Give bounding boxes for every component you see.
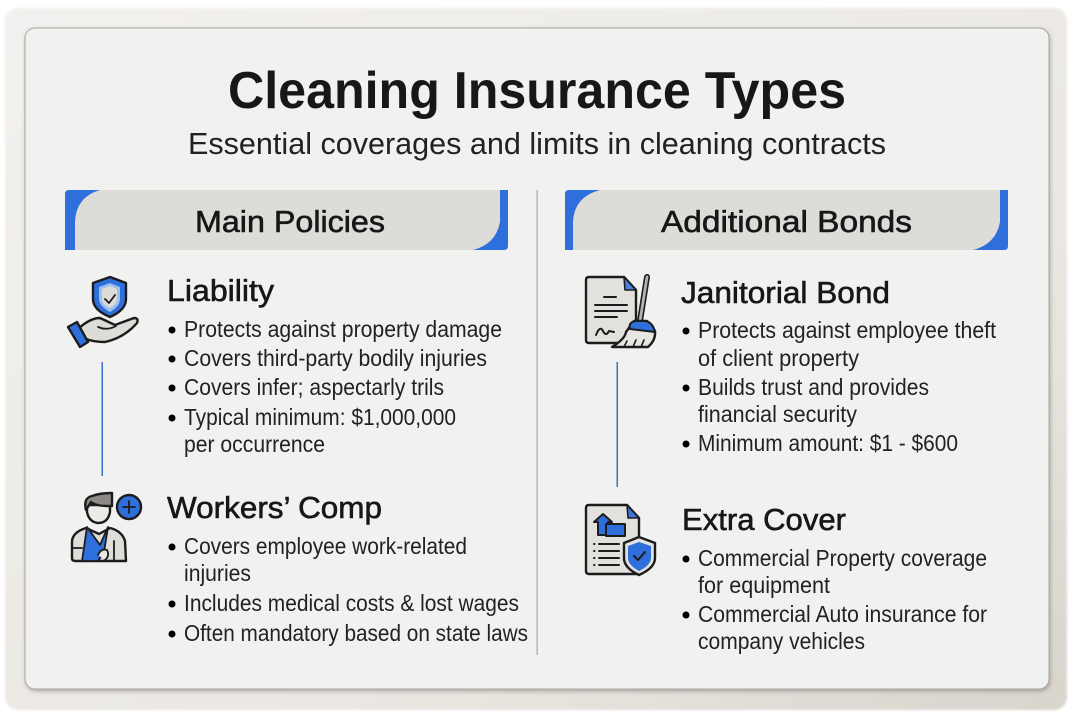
icon: property document with shield [586, 505, 655, 575]
block: Janitorial Bond: Janitorial Bond [681, 275, 890, 310]
connector: janitorial bond to extra cover [616, 362, 618, 487]
block: Extra Cover [682, 502, 987, 654]
block: Liability: Typical minimum: $1,000,000 [184, 404, 456, 430]
block: Workers' Comp [167, 490, 528, 646]
block: Janitorial Bond: Minimum amount: $1 - $600 [698, 430, 958, 456]
block: Janitorial Bond: Builds trust and provides [698, 374, 929, 400]
icon: shield on hand [68, 277, 138, 347]
connector: liability to workers comp [102, 362, 103, 476]
block: Liability: Covers infer; aspectarly trils [184, 374, 444, 400]
block: Liability: Covers third-party bodily injuries [184, 345, 487, 371]
block: Janitorial Bond: Protects against employee theft [698, 317, 997, 343]
heading: Main Policies [65, 190, 508, 250]
block: Extra Cover: Commercial Auto insurance for [698, 601, 987, 627]
block: Liability: Protects against property damage [184, 316, 502, 342]
icon: document and broom [586, 277, 655, 347]
heading: Additional Bonds: Additional Bonds [661, 204, 912, 239]
heading: Main Policies: Main Policies [195, 204, 385, 239]
block: Janitorial Bond: of client property [698, 345, 859, 371]
subtitle: Essential coverages and limits in cleaning contracts [188, 126, 886, 161]
block: Workers' Comp: Covers employee work-related [184, 533, 467, 559]
heading: Additional Bonds [565, 190, 1008, 250]
block: Janitorial Bond: financial security [698, 401, 857, 427]
block: Liability: per occurrence [184, 431, 325, 457]
block: Liability [167, 273, 502, 457]
block: Workers' Comp: Often mandatory based on state laws [184, 620, 528, 646]
block: Liability: Liability [167, 273, 275, 308]
block: Extra Cover: Commercial Property coverage [698, 545, 987, 571]
block: Extra Cover: Extra Cover [682, 502, 846, 537]
block: Janitorial Bond [681, 275, 997, 456]
column divider [536, 190, 538, 655]
block: Extra Cover: for equipment [698, 572, 831, 598]
title: Cleaning Insurance Types [228, 62, 846, 120]
block: Extra Cover: company vehicles [698, 628, 865, 654]
block: Workers' Comp: Workers’ Comp [167, 490, 382, 525]
icon: injured worker [72, 493, 141, 561]
block: Workers' Comp: Includes medical costs & lost wages [184, 590, 519, 616]
block: Workers' Comp: injuries [184, 560, 251, 586]
